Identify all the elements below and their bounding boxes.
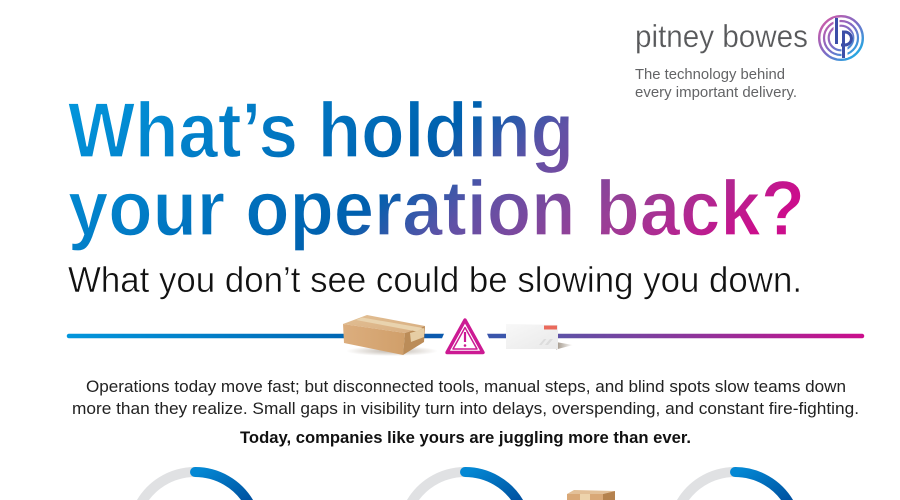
title: What’s holding: [68, 86, 574, 174]
icon: small cardboard box: [567, 490, 615, 500]
donut chart 2 (cropped by the page edge): [411, 467, 519, 500]
logo: Pitney Bowes: [635, 16, 863, 101]
logo wordmark: pitney bowes: [635, 18, 808, 54]
donut chart 1 (cropped by the page edge): [141, 467, 249, 500]
divider line with icons: [69, 315, 862, 356]
icon: envelope: [506, 324, 573, 350]
title: your operation back?: [68, 164, 805, 252]
bold lead-in: Today, companies like yours are juggling more than ever.: [240, 429, 691, 447]
donut chart 3 (cropped by the page edge): [681, 467, 789, 500]
intro paragraph: [72, 377, 859, 418]
title: [68, 86, 805, 252]
icon: cardboard box: [343, 315, 438, 356]
logo tagline: The technology behind: [635, 67, 785, 83]
logo icon: concentric p/b mark: [819, 16, 863, 60]
intro paragraph: Operations today move fast; but disconnected tools, manual steps, and blind spots slow teams down: [86, 377, 846, 396]
logo: Pitney Bowes: every important delivery.: [635, 85, 797, 101]
icon: warning triangle: [447, 320, 483, 352]
intro paragraph: more than they realize. Small gaps in visibility turn into delays, overspending, and constant fire-fighting.: [72, 399, 859, 418]
subtitle: What you don’t see could be slowing you down.: [68, 259, 802, 300]
